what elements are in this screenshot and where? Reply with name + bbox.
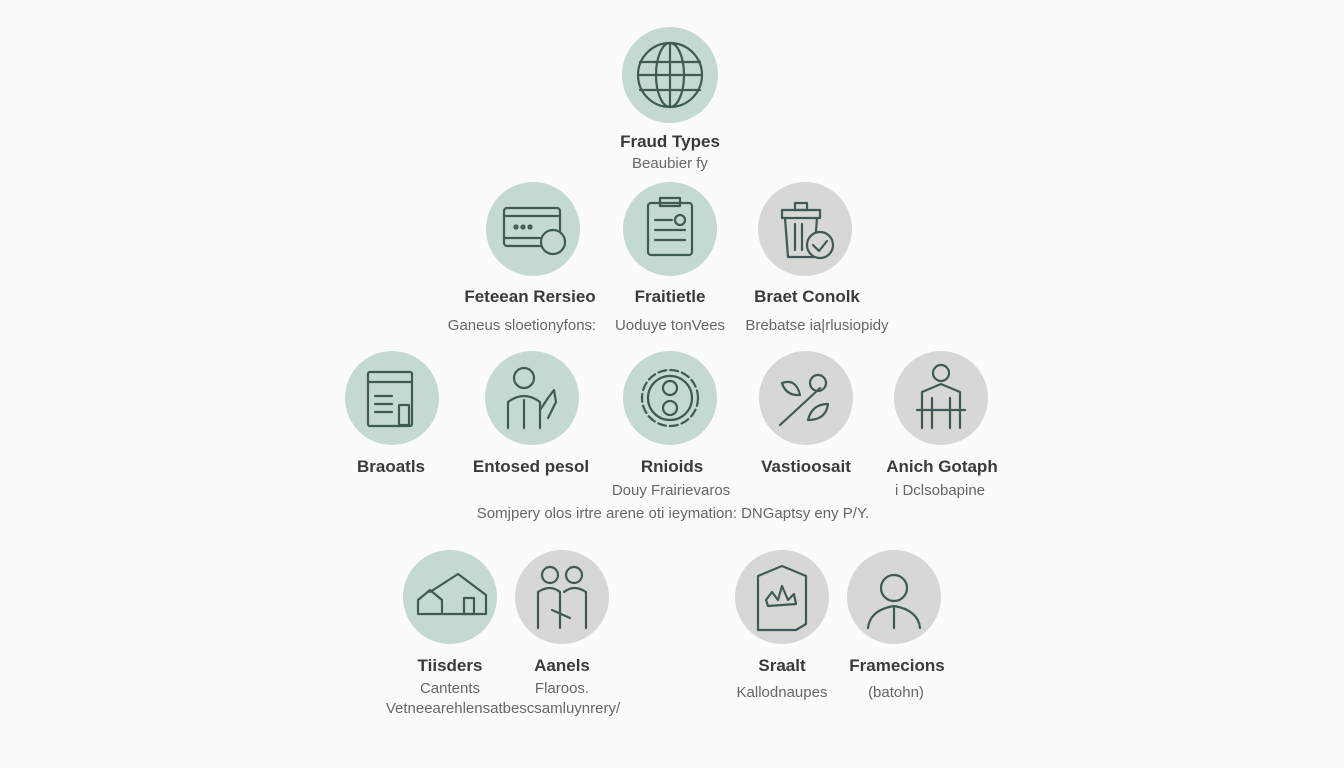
- icon: gear: [642, 370, 698, 426]
- icon: person headset: [868, 575, 920, 628]
- node: feteean rersieo: Feteean Rersieo: [464, 287, 596, 306]
- node: aanels: Flaroos.: [535, 680, 589, 697]
- node: rnioids: Douy Frairievaros: [612, 482, 730, 499]
- node: braoatls: Braoatls: [357, 457, 425, 476]
- node: tiisders: Cantents: [420, 680, 480, 697]
- node: framecions: (batohn): [868, 684, 924, 701]
- node: aanels: Aanels: [534, 656, 590, 675]
- text: row 3 left description: Vetneearehlensatbescsamluynrery/: [386, 700, 621, 717]
- node: sraalt: [735, 550, 829, 701]
- icon: houses: [418, 574, 486, 614]
- node: anich gotaph: Anich Gotaph: [886, 457, 998, 476]
- icon: shield doc: [758, 566, 806, 630]
- icon: hand leaf: [780, 375, 828, 425]
- node: fraud types: Fraud Types: [620, 132, 720, 151]
- icon: person: [508, 368, 556, 428]
- node: sraalt: Sraalt: [758, 656, 806, 675]
- node: braet conolk: Brebatse ia|rlusiopidy: [745, 317, 889, 334]
- icon: card: [504, 208, 565, 254]
- node: entosed pesol: Entosed pesol: [473, 457, 589, 476]
- icon: globe: [638, 43, 702, 107]
- node: entosed pesol: [473, 351, 589, 476]
- node: fraitietle: Uoduye tonVees: [615, 317, 725, 334]
- node: tiisders: [403, 550, 497, 697]
- node: fraud types: Beaubier fy: [632, 155, 708, 172]
- node: rnioids: Rnioids: [641, 457, 703, 476]
- node: rnioids: [612, 351, 730, 499]
- node: fraud types: [620, 27, 720, 172]
- node: feteean rersieo: [448, 182, 596, 334]
- node: vastioosait: [759, 351, 853, 476]
- node: fraitietle: [615, 182, 725, 334]
- node: vastioosait: Vastioosait: [761, 457, 851, 476]
- node: anich gotaph: [886, 351, 998, 499]
- node: fraitietle: Fraitietle: [635, 287, 705, 306]
- node: anich gotaph: i Dclsobapine: [895, 482, 985, 499]
- icon: bin check: [782, 203, 833, 258]
- icon: clipboard: [648, 198, 692, 255]
- node: braet conolk: [745, 182, 889, 334]
- icon: two people: [538, 567, 586, 628]
- node: braet conolk: Braet Conolk: [754, 287, 860, 306]
- node: framecions: [847, 550, 945, 701]
- icon: figure: [917, 365, 965, 428]
- icon: browser doc: [368, 372, 412, 426]
- node: feteean rersieo: Ganeus sloetionyfons:: [448, 317, 596, 334]
- node: sraalt: Kallodnaupes: [737, 684, 827, 701]
- text: row description: Somjpery olos irtre arene oti ieymation: DNGaptsy eny P/Y.: [477, 505, 869, 522]
- node: braoatls: [345, 351, 439, 476]
- node: aanels: [515, 550, 609, 697]
- node: framecions: Framecions: [849, 656, 945, 675]
- node: tiisders: Tiisders: [418, 656, 482, 675]
